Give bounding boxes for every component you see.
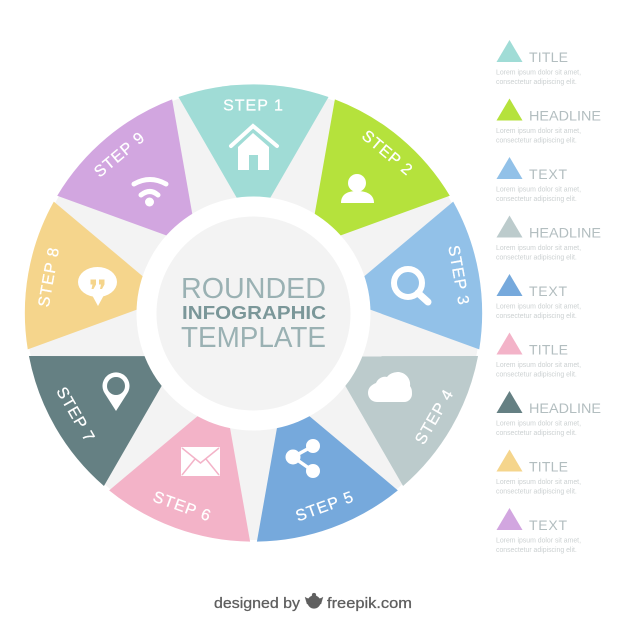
legend item 6: consectetur adipiscing elit. (496, 372, 577, 378)
segment: step 4 (314, 305, 489, 492)
legend item 1: consectetur adipiscing elit. (496, 79, 577, 86)
step labels: STEP 1 (223, 98, 284, 114)
legend item 9 (496, 508, 581, 554)
step labels: STEP 8 (36, 246, 63, 308)
segment: step 9 (49, 90, 238, 275)
step labels: STEP 4 (412, 386, 458, 448)
segment: step 8 (15, 199, 155, 367)
legend item 8: consectetur adipiscing elit. (496, 488, 577, 496)
icon: search (394, 269, 428, 302)
legend item 2: consectetur adipiscing elit. (496, 138, 577, 144)
icon: person (341, 174, 374, 203)
segment: step 5 (222, 394, 402, 554)
legend item 7: HEADLINE (529, 400, 601, 416)
legend item 5: consectetur adipiscing elit. (496, 313, 577, 320)
legend item 2: HEADLINE (529, 108, 601, 124)
legend item 9: TEXT (529, 517, 567, 533)
center disc (156, 216, 350, 410)
legend item 6: TITLE (529, 342, 568, 358)
legend item 7 (496, 391, 601, 437)
legend item 2 (496, 98, 601, 144)
icon: envelope (181, 447, 220, 476)
legend item 9: Lorem ipsum dolor sit amet, (496, 538, 581, 544)
footer credit: designed by (214, 595, 301, 612)
legend item 9: consectetur adipiscing elit. (496, 547, 577, 554)
legend item 3: TEXT (529, 166, 567, 182)
legend item 3 (496, 157, 581, 203)
footer credit (214, 593, 412, 612)
legend item 1: TITLE (529, 49, 568, 65)
legend item 5 (496, 274, 581, 320)
legend item 5: TEXT (529, 283, 567, 299)
segment: step 1 (178, 84, 328, 200)
legend item 4: consectetur adipiscing elit. (496, 254, 577, 262)
legend item 3: Lorem ipsum dolor sit amet, (496, 186, 581, 194)
legend item 4: Lorem ipsum dolor sit amet, (496, 245, 581, 252)
icon: wifi (134, 180, 166, 206)
legend item 4 (496, 216, 601, 262)
white ring (136, 196, 370, 430)
icon: cloud (368, 372, 412, 402)
legend item 8: TITLE (529, 458, 568, 474)
segment: step 2 (269, 90, 458, 275)
legend item 5: Lorem ipsum dolor sit amet, (496, 304, 581, 310)
legend item 3: consectetur adipiscing elit. (496, 196, 577, 203)
legend item 1 (496, 40, 581, 86)
step labels: STEP 9 (91, 129, 149, 181)
segment: step 6 (105, 394, 285, 554)
legend item 4: HEADLINE (529, 224, 601, 240)
step labels: STEP 7 (52, 384, 98, 446)
legend item 2: Lorem ipsum dolor sit amet, (496, 128, 581, 135)
legend item 8: Lorem ipsum dolor sit amet, (496, 479, 581, 486)
title (181, 273, 326, 354)
icon: pin (102, 372, 130, 411)
legend item 7: Lorem ipsum dolor sit amet, (496, 420, 581, 428)
legend item 6: Lorem ipsum dolor sit amet, (496, 362, 581, 369)
step labels: STEP 3 (444, 244, 472, 307)
legend item 8 (496, 450, 581, 496)
footer credit: freepik.com (327, 595, 412, 612)
icon: house (231, 126, 277, 170)
legend item 1: Lorem ipsum dolor sit amet, (496, 70, 581, 76)
segment: step 3 (352, 199, 492, 367)
step labels: STEP 2 (358, 127, 416, 180)
icon: share (286, 439, 320, 478)
title: TEMPLATE (181, 322, 326, 354)
legend item 6 (496, 332, 581, 378)
title: ROUNDED (181, 273, 326, 305)
title: INFOGRAPHIC (182, 302, 326, 323)
step labels: STEP 5 (294, 489, 356, 525)
icon: speech bubble (78, 267, 117, 306)
step labels (36, 98, 472, 525)
step labels: STEP 6 (151, 489, 213, 525)
legend item 7: consectetur adipiscing elit. (496, 430, 577, 437)
panel: background disc (26, 86, 480, 540)
segment: step 7 (18, 305, 193, 492)
